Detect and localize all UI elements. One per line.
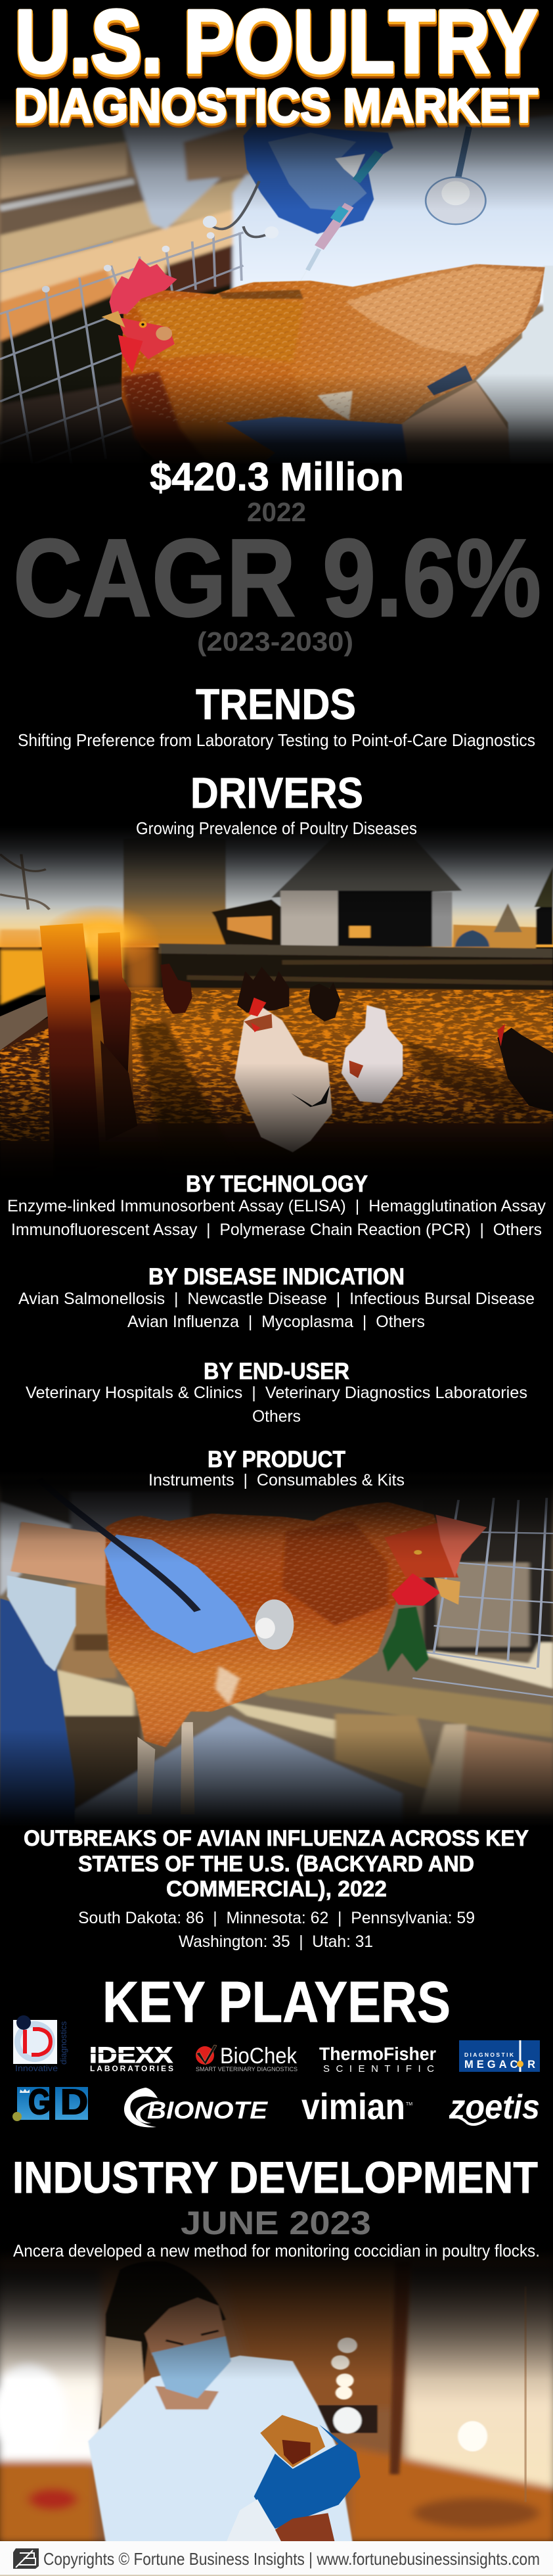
segment: by disease indication: Avian Salmonellosis | Newcastle Disease | Infectious Bursal Disease [18,1290,535,1308]
logo: ID Innovative Diagnostics: Innovative [15,2063,58,2073]
syringe [356,152,379,181]
title [14,0,539,136]
logo: BioChek: BioChek [220,2044,298,2069]
segment: by product: Instruments | Consumables & Kits [148,1471,405,1489]
heading: trends: TRENDS [196,680,356,728]
grass texture [0,990,553,1141]
stethoscope [68,1501,201,1612]
outbreak figures [78,1909,475,1951]
segment: by end-user: Veterinary Hospitals & Clinics | Veterinary Diagnostics Laboratories [26,1384,527,1402]
segment: by end-user: Others [252,1407,301,1426]
logo: Thermo Fisher Scientific: ThermoFisher [319,2044,436,2064]
segment: by disease indication: Avian Influenza | Mycoplasma | Others [127,1313,425,1331]
heading: avian influenza outbreaks: STATES OF THE U.S. (BACKYARD AND [78,1852,474,1877]
outbreak figures: Washington: 35 | Utah: 31 [179,1932,373,1951]
segment: by technology: Enzyme-linked Immunosorbent Assay (ELISA) | Hemagglutination Assay [7,1197,546,1215]
logo: Vimian: vimian [301,2086,405,2127]
mesh [0,231,244,452]
white rooster [234,1006,332,1152]
segment: by technology [7,1171,546,1239]
development date: JUNE 2023 [181,2205,371,2241]
market value: $420.3 Million [150,455,404,499]
logo: IDEXX Laboratories: IDEXX [89,2043,173,2068]
CAGR period: (2023-2030) [197,626,353,657]
logo: Vimian: TM [406,2102,412,2107]
footer logo [13,2548,39,2569]
logo: GD: G [28,2082,51,2122]
logo: GD [12,2082,88,2122]
white hen [342,1005,403,1103]
fence posts [39,923,98,1125]
hen head [109,258,177,314]
fade overlay: farm photo [0,812,553,1183]
hen body [122,264,545,477]
segment: by technology: BY TECHNOLOGY [186,1171,368,1197]
woman [88,2261,353,2543]
drivers text: Growing Prevalence of Poultry Diseases [136,818,417,838]
arms and sleeve [226,266,553,456]
heading: drivers: DRIVERS [190,768,363,817]
scrubs and shirt [0,1522,115,1825]
market value year: 2022 [247,497,306,527]
logo: Bionote [124,2088,268,2127]
logo: Zoetis: zoetis [449,2088,540,2126]
greens [383,1607,428,1672]
fade overlay: stethoscope photo [0,1466,553,1834]
logo: GD: D [60,2082,88,2122]
footer bar [0,2541,553,2576]
photo: veterinarian injecting hen [0,105,553,460]
heading: avian influenza outbreaks: COMMERCIAL), 2022 [166,1877,387,1902]
segment: by end-user: BY END-USER [204,1359,349,1384]
logo: Diagnostik Megacor: DIAGNOSTIK [464,2051,514,2058]
legs [137,1737,155,1814]
outbreak figures: South Dakota: 86 | Minnesota: 62 | Pennsylvania: 59 [78,1909,475,1927]
chick and gloves [260,2415,325,2468]
heading: avian influenza outbreaks [24,1826,529,1902]
segment: by product: BY PRODUCT [208,1447,345,1472]
logo: IDEXX Laboratories: LABORATORIES [90,2064,173,2073]
dark hen right [497,1028,553,1112]
logo: Thermo Fisher Scientific [319,2044,436,2074]
dark hens [160,964,192,1014]
logo: Thermo Fisher Scientific: SCIENTIFIC [323,2063,434,2074]
segment: by end-user [26,1359,527,1426]
logo: Bionote: BIONOTE [147,2097,268,2124]
heading: key players: KEY PLAYERS [102,1969,451,2034]
fade overlay: hero photo [0,72,553,467]
lights [317,2337,487,2451]
photo: woman in mask holding chick [0,2251,553,2543]
logo: IDEXX Laboratories [89,2043,173,2073]
stethoscope [458,127,469,179]
trends text: Shifting Preference from Laboratory Testing to Point-of-Care Diagnostics [18,730,535,750]
photo: hens on a farm at sunset [0,833,553,1156]
logo: Diagnostik Megacor: MEGAC R [464,2059,535,2071]
logo: BioChek: SMART VETERINARY DIAGNOSTICS [196,2066,298,2073]
hen head [384,1514,487,1606]
segment: by product [148,1447,405,1489]
segment: by disease indication [18,1264,535,1331]
fade overlay: woman photo [0,2245,553,2379]
glove [104,1535,255,1653]
logo: Diagnostik Megacor [459,2040,540,2072]
logo: ID Innovative Diagnostics [13,2015,68,2073]
heading: avian influenza outbreaks: OUTBREAKS OF AVIAN INFLUENZA ACROSS KEY [24,1826,529,1851]
hen [106,1502,437,1747]
logo: BioChek [196,2044,298,2073]
logo: ID Innovative Diagnostics: diagnostics [58,2021,68,2065]
photo: veterinarian with stethoscope on hen [0,1472,553,1825]
segment: by disease indication: BY DISEASE INDICATION [148,1264,405,1290]
glove [244,124,393,234]
wire [412,1498,553,1697]
segment: by technology: Immunofluorescent Assay | Polymerase Chain Reaction (PCR) | Others [11,1221,542,1239]
